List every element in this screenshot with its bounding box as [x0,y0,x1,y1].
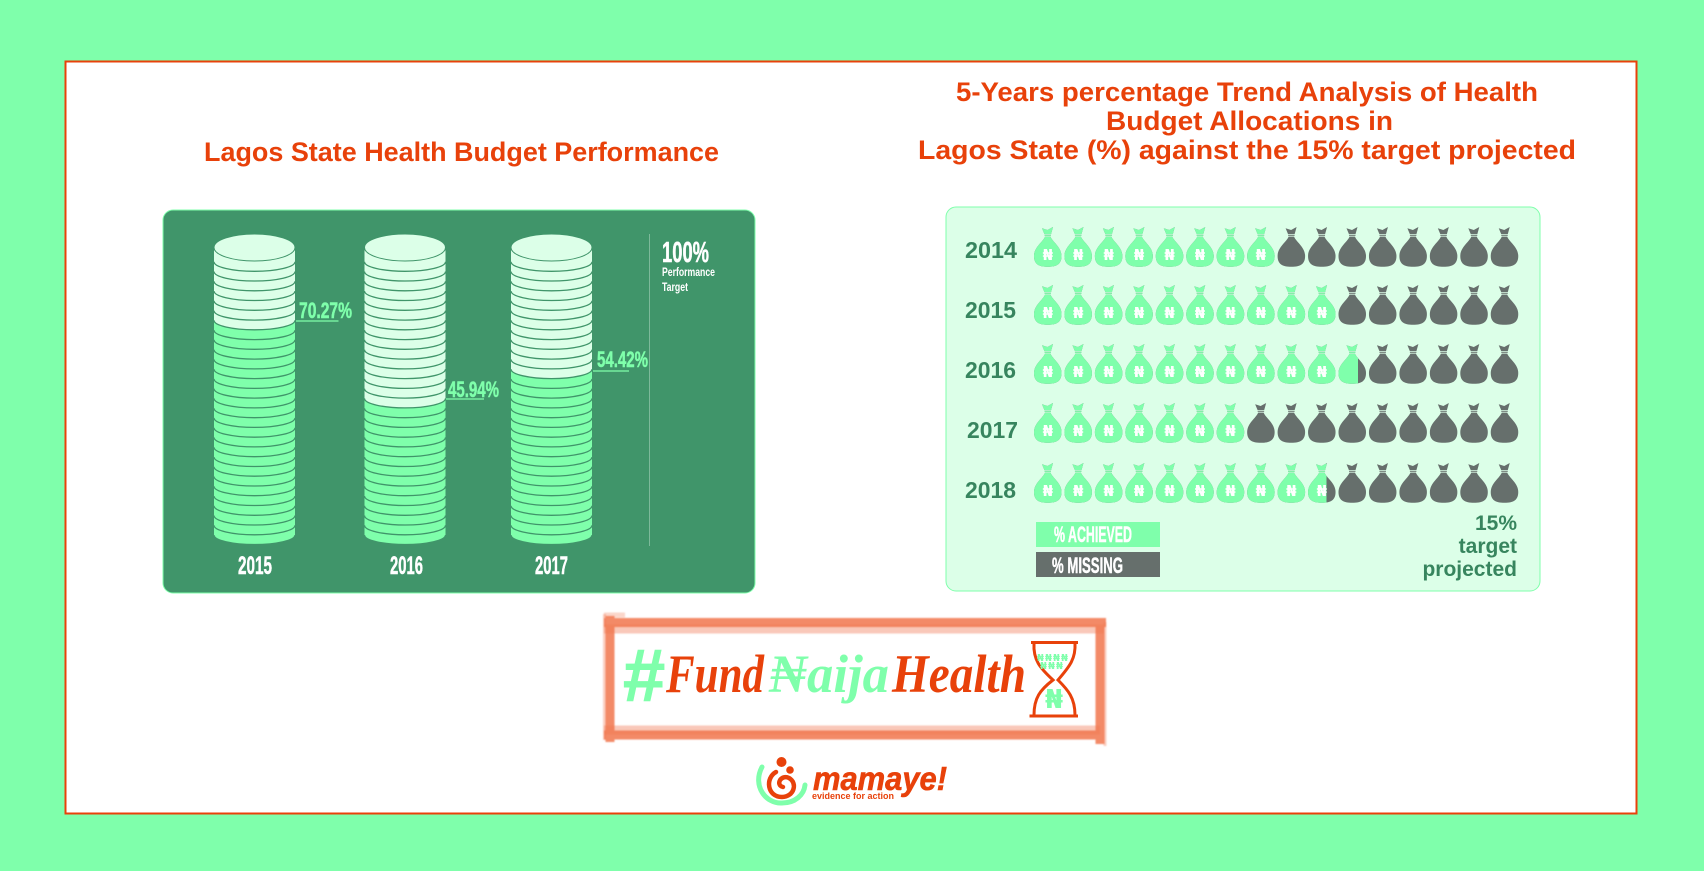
hashtag text [622,634,1026,717]
logo: Mamaye [759,757,947,803]
callout: 70.27% [296,298,352,323]
row: 2015 [965,285,1518,325]
hashtag text: Fund [665,644,765,704]
callout: 45.94%: 45.94% [448,377,499,402]
legend: achieved: % ACHIEVED [1054,522,1132,547]
heading: right chart title: 5-Years percentage Trend Analysis of Health [956,77,1538,107]
row: 2015: 2015 [965,297,1016,323]
label: 15% target projected [1422,512,1517,581]
target line and label: 100% performance target: 100% [662,237,709,269]
year labels: 2017 [535,552,568,580]
icon: hourglass: ₦₦₦ [1040,661,1063,672]
icon: hourglass: ₦₦₦₦ [1037,653,1068,664]
wordmark: mamaye! [813,760,947,797]
year labels: 2016 [390,552,423,580]
hashtag banner [604,614,1106,746]
panel: 5-year trend pictogram [946,207,1540,591]
row: 2016: 2016 [965,357,1016,383]
row: 2014: ₦₦₦₦₦₦₦₦ [1043,246,1267,264]
hashtag text: Health [891,644,1026,704]
callout: 54.42% [593,347,648,372]
icon: hourglass [1030,642,1078,716]
row: 2014: 2014 [965,237,1017,263]
row: 2017: 2017 [967,417,1018,443]
row: 2017: ₦₦₦₦₦₦₦ [1043,422,1236,440]
row: 2018 [965,463,1518,503]
year labels [238,552,568,580]
coin stack: 2016 [364,234,446,544]
hashtag text: # [622,634,665,717]
hashtag text: ₦aija [768,644,889,704]
heading: right chart title: Budget Allocations in [1106,106,1393,136]
brush frame [604,614,1106,746]
heading: left chart title: Lagos State Health Budget Performance [204,137,719,167]
heading: right chart title [918,77,1576,165]
row: 2016 [965,344,1518,384]
coin stack: 2015 [214,234,295,544]
target line and label: 100% performance target: Target [662,280,688,294]
label: 15% target projected: target [1459,535,1517,558]
callout: 45.94% [446,377,499,402]
year labels: 2015 [238,552,272,580]
label: 15% target projected: 15% [1475,512,1517,535]
white framed page [66,62,1636,814]
coin stack: 2017 [511,234,592,544]
heading: right chart title: Lagos State (%) against the 15% target projected [918,135,1576,165]
tagline: evidence for action [812,791,894,802]
legend: achieved [1036,522,1160,547]
label: 15% target projected: projected [1422,558,1517,581]
legend: missing: % MISSING [1052,553,1123,578]
target line and label: 100% performance target [650,234,715,546]
callout: 54.42%: 54.42% [597,347,648,372]
row: 2018: ₦₦₦₦₦₦₦₦₦₦ [1043,482,1328,500]
row: 2014 [965,227,1518,267]
row: 2015: ₦₦₦₦₦₦₦₦₦₦ [1043,304,1328,322]
icon: hourglass: ₦ [1045,685,1063,715]
icon: swirl [759,757,805,803]
row: 2017 [967,403,1518,443]
row: 2018: 2018 [965,477,1016,503]
panel: budget performance chart [163,210,755,593]
callout: 70.27%: 70.27% [299,298,352,323]
target line and label: 100% performance target: Performance [662,265,715,279]
row: 2016: ₦₦₦₦₦₦₦₦₦₦ [1043,363,1328,381]
